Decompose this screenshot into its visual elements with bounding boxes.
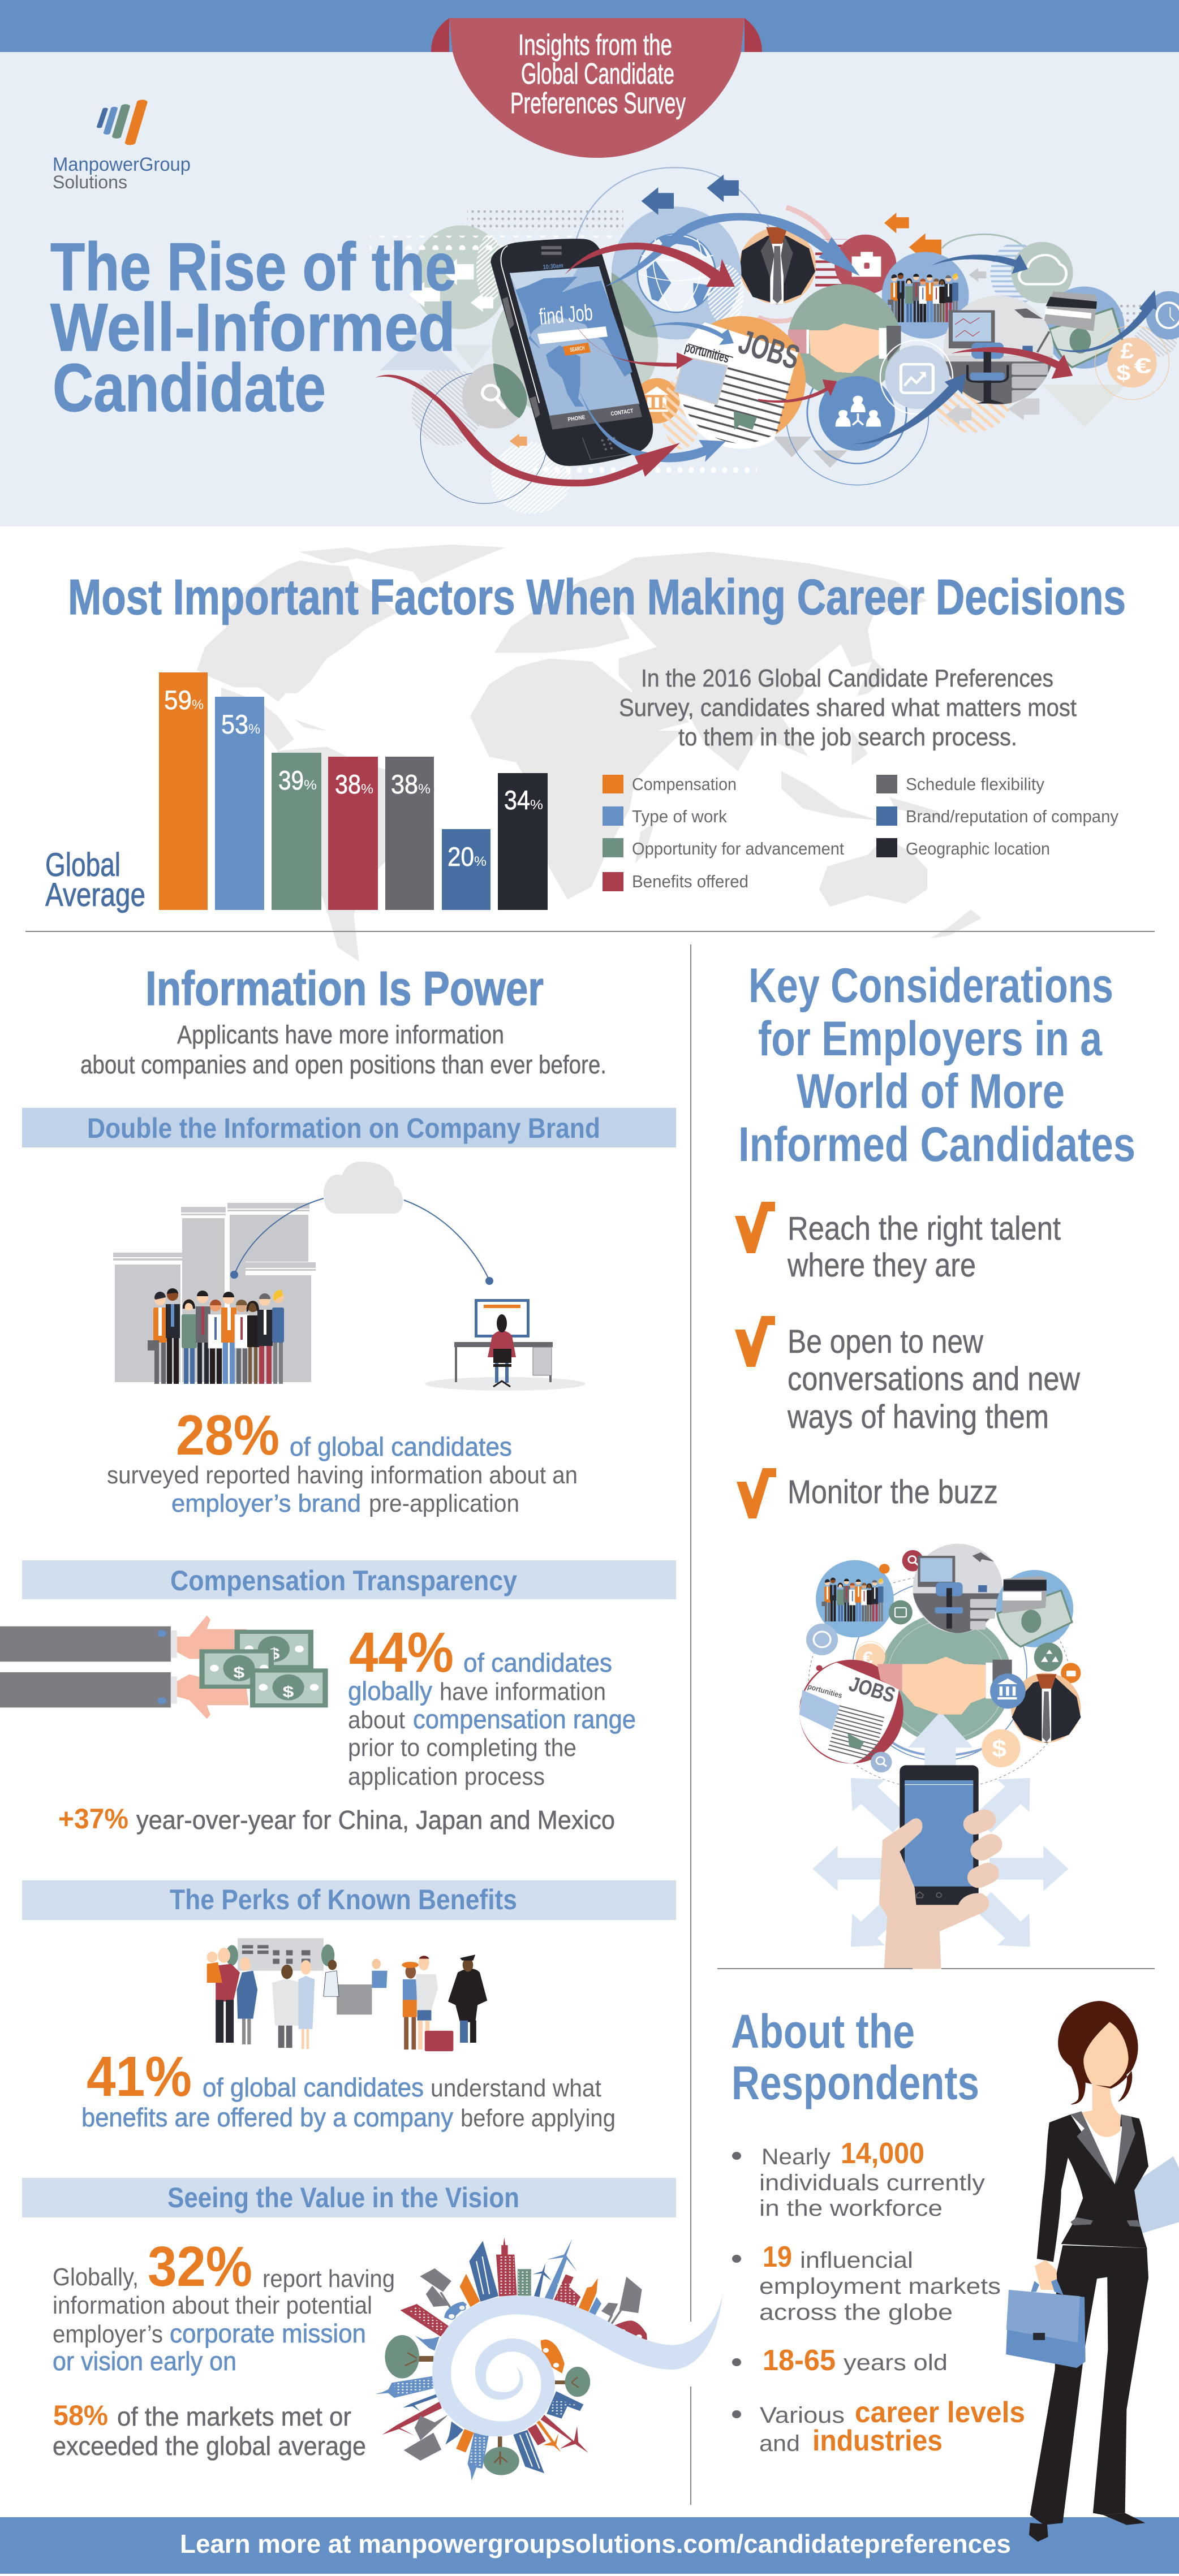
bar: type of work 53%: 53 (221, 709, 248, 739)
stat: 32% corporate mission: information about their potential (53, 2292, 372, 2319)
hero illustration: smartphone with job search screen: SEARCH (570, 345, 585, 353)
chart legend: Compensation (632, 774, 737, 794)
bar: schedule flexibility 38%: 38 (391, 769, 418, 799)
bar: opportunity for advancement 39%: 39 (278, 765, 304, 795)
illustration: phone in hand with connected circles (799, 1544, 1081, 1969)
bar: compensation 59%: % (192, 697, 204, 713)
fact: 19 markets: employment markets (759, 2274, 1001, 2299)
footer band: Learn more at manpowergroupsolutions.com/candidatepreferences (180, 2529, 1011, 2558)
section band: compensation transparency (22, 1560, 676, 1599)
ribbon badge: survey title: Global Candidate (521, 58, 674, 90)
stat: 32% corporate mission: or vision early on (53, 2346, 236, 2376)
fact: 18-65 years old (732, 2344, 948, 2377)
stat: 32% corporate mission: Globally, (53, 2263, 139, 2291)
bar: schedule flexibility 38% (385, 757, 434, 910)
bar: compensation 59%: 59 (164, 685, 192, 715)
stat: 28% employer's brand: pre-application (369, 1490, 519, 1517)
section band: known benefits: The Perks of Known Benefits (170, 1884, 517, 1915)
bar: brand reputation 20%: % (474, 854, 487, 869)
world map background (197, 545, 982, 961)
intro text: applicants (80, 1020, 606, 1079)
fact: 19 markets: across the globe (759, 2300, 953, 2325)
illustration: hands holding money (0, 1615, 328, 1719)
stat: 32% corporate mission: employer’s (53, 2320, 163, 2348)
illustration: phone in hand with connected circles: $ (992, 1736, 1006, 1762)
stat: 41% benefits: before applying (461, 2104, 616, 2132)
stat: 44% compensation range: prior to completing the (348, 1734, 576, 1762)
chart label: global average: Global (45, 847, 121, 883)
heading: key considerations (738, 959, 1135, 1172)
chart legend (603, 774, 1118, 891)
stat: 44% compensation range: globally (348, 1676, 432, 1706)
icon: check mark 1 (735, 1202, 775, 1253)
chart legend: Opportunity for advancement (632, 839, 844, 858)
item text: reach the right talent (787, 1210, 1061, 1284)
stat: 41% benefits: 41% (87, 2045, 192, 2108)
hero title: Well-Informed (50, 290, 455, 365)
section band: company brand: Double the Information on Company Brand (87, 1112, 600, 1144)
bar: benefits offered 38%: 38 (335, 769, 361, 799)
stat: 58% markets (53, 2400, 366, 2461)
stat: 44% compensation range: compensation range (413, 1705, 636, 1734)
illustration: phone in hand with connected circles: € (863, 1647, 873, 1667)
stat: 28% employer's brand: surveyed reported having information about an (107, 1461, 578, 1489)
fact: career levels and industries: industries (812, 2424, 943, 2457)
hero title (50, 229, 457, 426)
survey intro paragraph: In the 2016 Global Candidate Preferences (641, 665, 1053, 692)
survey intro paragraph: to them in the job search process. (678, 723, 1017, 751)
illustration: hands holding money: $ (282, 1683, 294, 1701)
stat: 28% employer's brand: 28% (176, 1404, 279, 1467)
illustration: hands holding money: $ (233, 1664, 244, 1681)
bar chart: global average (159, 672, 548, 910)
bar: geographic location 34%: 34 (504, 785, 530, 815)
heading: about the respondents (731, 2005, 979, 2109)
chart label: global average: Average (45, 877, 145, 913)
stat: 41% benefits: benefits are offered by a company (81, 2103, 453, 2132)
fact: 14,000 individuals: individuals currently (759, 2171, 985, 2195)
respondent facts list (732, 2137, 1025, 2457)
hero illustration: newspaper with jobs: portunities (683, 340, 731, 366)
checklist: employer considerations (735, 1202, 1081, 1518)
hero title: Candidate (53, 350, 326, 426)
fact: 14,000 individuals: 14,000 (841, 2137, 924, 2170)
bar: benefits offered 38%: % (361, 782, 373, 797)
hero illustration: connected circles right side (back layer): € (1134, 354, 1152, 378)
stat: 32% corporate mission: 32% (148, 2235, 252, 2298)
logo: ManpowerGroup Solutions: ManpowerGroup (53, 154, 191, 175)
fact: 18-65 years old: years old (844, 2350, 948, 2375)
stat: 44% compensation range (348, 1621, 636, 1790)
bar: geographic location 34% (498, 773, 548, 910)
illustration: hands holding money: $ (269, 1645, 280, 1662)
hero illustration: smartphone with job search screen: PHONE (567, 415, 586, 423)
stat: 44% compensation range: have information (440, 1678, 606, 1706)
footer band (0, 2517, 1179, 2574)
hero illustration: smartphone with job search screen (490, 239, 653, 466)
chart label: global average (45, 847, 145, 913)
stat: 32% corporate mission: corporate mission (170, 2319, 366, 2348)
heading: about the respondents: Respondents (732, 2056, 979, 2109)
chart legend: Schedule flexibility (906, 774, 1044, 794)
intro text: applicants: about companies and open positions than ever before. (80, 1050, 606, 1079)
bar: type of work 53%: % (248, 722, 260, 737)
ribbon badge: survey title: Insights from the (518, 29, 672, 62)
hero illustration: curved arrows (375, 213, 1157, 486)
item text: be open to new conversations: conversations and new (788, 1361, 1081, 1397)
section band: vision (22, 2178, 676, 2217)
illustration: family, doctor, meeting, travellers, graduate (207, 1938, 487, 2051)
hero illustration: connected circles right side (back layer): $ (1116, 361, 1131, 386)
heading: key considerations: World of More (797, 1064, 1065, 1119)
item text: reach the right talent: where they are (787, 1247, 976, 1284)
stat: 28% employer's brand (107, 1404, 578, 1517)
hero illustration: smartphone with job search screen: CONTACT (610, 408, 634, 417)
hero illustration: connected circles right side (back layer) (739, 208, 1179, 485)
stat: 41% benefits: understand what (431, 2074, 601, 2102)
chart legend: Benefits offered (632, 871, 748, 891)
ribbon badge: survey title (431, 18, 762, 158)
icon: check mark 3 (737, 1468, 776, 1518)
illustration: swirl city (375, 2237, 723, 2480)
section band: vision: Seeing the Value in the Vision (167, 2182, 519, 2213)
chart legend: Brand/reputation of company (906, 806, 1118, 826)
stat: +37% year-over-year: year-over-year for China, Japan and Mexico (136, 1805, 615, 1835)
hero illustration: newspaper with jobs (675, 316, 806, 449)
stat: 58% markets: 58% (53, 2400, 108, 2431)
logo: ManpowerGroup Solutions (53, 102, 191, 192)
item text: monitor the buzz: Monitor the buzz (788, 1474, 998, 1511)
survey intro paragraph: Survey, candidates shared what matters most (619, 694, 1077, 722)
bar: type of work 53% (215, 697, 264, 910)
stat: 32% corporate mission: report having (263, 2265, 395, 2293)
fact: 19 markets: influencial (800, 2248, 913, 2273)
section band: known benefits (22, 1880, 676, 1920)
stat: 32% corporate mission (53, 2235, 395, 2376)
heading: about the respondents: About the (731, 2005, 915, 2058)
hero illustration: smartphone with job search screen: find Job (538, 300, 593, 330)
stat: 44% compensation range: about (348, 1706, 405, 1734)
top blue band (0, 0, 1179, 52)
illustration: employees connect to candidate via cloud (113, 1162, 586, 1391)
bar: opportunity for advancement 39%: % (304, 778, 317, 793)
chart legend: Type of work (632, 806, 727, 826)
section band: compensation transparency: Compensation Transparency (170, 1565, 517, 1596)
stat: 28% employer's brand: of global candidates (290, 1432, 512, 1461)
hero illustration: left background shapes (370, 167, 769, 514)
fact: career levels and industries: Various (760, 2403, 845, 2428)
icon: check mark 2 (735, 1316, 775, 1367)
stat: 44% compensation range: of candidates (463, 1648, 612, 1677)
fact: career levels and industries (732, 2396, 1025, 2457)
hero illustration: newspaper with jobs: JOBS (734, 322, 804, 377)
survey intro paragraph (619, 665, 1077, 751)
bar: opportunity for advancement 39% (272, 753, 321, 910)
bar: benefits offered 38% (328, 757, 378, 910)
bar: brand reputation 20% (442, 829, 490, 910)
item text: be open to new conversations (787, 1323, 1081, 1435)
fact: 19 markets (732, 2241, 1001, 2325)
bar: schedule flexibility 38%: % (418, 782, 431, 797)
bar: compensation 59% (159, 672, 208, 910)
stat: 44% compensation range: 44% (349, 1621, 454, 1684)
stat: 58% markets: exceeded the global average (53, 2431, 366, 2461)
illustration: phone in hand with connected circles: JOBS (846, 1672, 898, 1707)
item text: reach the right talent: Reach the right talent (788, 1210, 1061, 1247)
bar: geographic location 34%: % (530, 797, 543, 813)
fact: 14,000 individuals: Nearly (761, 2144, 831, 2169)
stat: +37% year-over-year: +37% (58, 1803, 128, 1835)
hero illustration: smartphone with job search screen: 10:30am (543, 262, 563, 271)
item text: be open to new conversations: ways of having them (787, 1399, 1049, 1435)
hero background panel (0, 52, 1179, 527)
item text: be open to new conversations: Be open to new (788, 1323, 984, 1360)
fact: 14,000 individuals (732, 2137, 985, 2221)
illustration: businesswoman with briefcase and folder (1006, 2001, 1179, 2542)
intro text: applicants: Applicants have more information (177, 1020, 504, 1049)
stat: 58% markets: of the markets met or (117, 2402, 351, 2431)
fact: 19 markets: 19 (763, 2241, 792, 2273)
chart legend: Geographic location (906, 839, 1050, 858)
illustration: phone in hand with connected circles: portunities (807, 1682, 844, 1700)
logo: ManpowerGroup Solutions: Solutions (53, 172, 127, 192)
stat: 41% benefits (81, 2045, 616, 2132)
heading: information is power: Information Is Power (145, 962, 544, 1016)
fact: career levels and industries: and (759, 2431, 800, 2456)
fact: career levels and industries: career levels (855, 2396, 1025, 2429)
hero title: The Rise of the (50, 229, 457, 305)
fact: 18-65 years old: 18-65 (763, 2344, 836, 2377)
ribbon badge: survey title: Preferences Survey (510, 87, 686, 120)
heading: key considerations: for Employers in a (758, 1012, 1103, 1066)
stat: 28% employer's brand: employer’s brand (171, 1490, 361, 1517)
fact: 14,000 individuals: in the workforce (759, 2196, 943, 2221)
stat: 44% compensation range: application process (348, 1763, 545, 1790)
stat: 41% benefits: of global candidates (203, 2073, 424, 2102)
bar: brand reputation 20%: 20 (447, 842, 474, 871)
hero illustration: connected circles right side (back layer): £ (1121, 339, 1134, 364)
